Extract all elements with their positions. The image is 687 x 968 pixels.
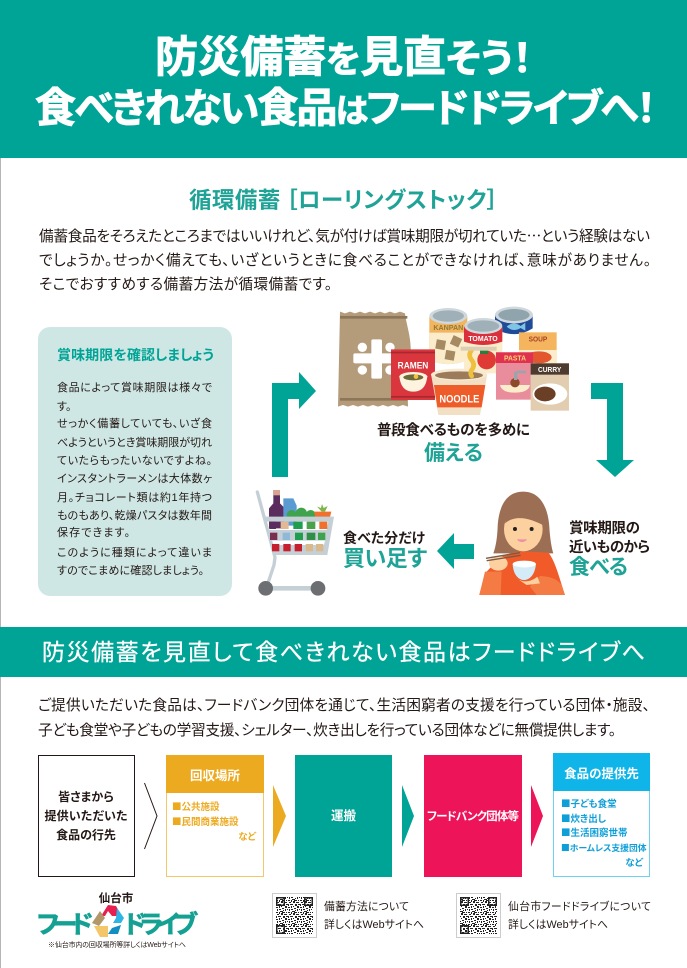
panel body text: 月。チョコレート類は約1年持つ bbox=[57, 490, 212, 504]
kanpan can bbox=[429, 308, 467, 364]
intro paragraph: 備蓄食品をそろえたところまではいいけれど、気が付けば賞味期限が切れていた…という経験はない bbox=[39, 225, 650, 246]
panel body text: せっかく備蓄していても、いざ食 bbox=[57, 416, 212, 430]
pasta box bbox=[496, 352, 533, 400]
arrow: left bbox=[437, 533, 474, 569]
illustration: shopping cart bbox=[257, 490, 334, 596]
flow box: recipients: ■子ども食堂 bbox=[561, 796, 617, 810]
arrow: up and right bbox=[272, 372, 316, 477]
arrow: outline chevron bbox=[144, 783, 157, 849]
panel body text: ていたらもったいないですよね。 bbox=[57, 454, 212, 467]
soup box bbox=[519, 332, 557, 367]
description paragraph bbox=[38, 697, 650, 739]
arrow: orange bbox=[273, 785, 286, 847]
intro paragraph bbox=[39, 225, 651, 293]
caption: prepare bbox=[377, 421, 530, 465]
section banner bbox=[0, 627, 687, 677]
description paragraph: 子ども食堂や子どもの学習支援、シェルター、炊き出しを行っている団体などに無償提供します。 bbox=[38, 722, 616, 739]
caption: restock: 買い足す bbox=[343, 546, 427, 571]
QR caption: stock method: 備蓄方法について bbox=[324, 899, 409, 913]
flow box: transport: 運搬 bbox=[331, 808, 356, 823]
QR code: food drive bbox=[456, 894, 500, 938]
intro paragraph: でしょうか。せっかく備えても、いざというときに食べることができなければ、意味がありません。 bbox=[39, 251, 651, 269]
caption: restock bbox=[343, 530, 427, 571]
illustration: person eating bbox=[479, 492, 565, 595]
flow box: recipients bbox=[553, 753, 650, 876]
flow box: recipients: ■ホームレス支援団体 bbox=[561, 841, 647, 854]
caption: eat: 賞味期限の bbox=[569, 520, 640, 537]
panel heading: 賞味期限を確認しましょう bbox=[57, 347, 214, 363]
flow box: collection points: ■公共施設 bbox=[172, 799, 220, 813]
kanpan can: KANPAN bbox=[433, 323, 464, 332]
panel body text: 保存できます。 bbox=[57, 525, 130, 539]
flow box: recipients: など bbox=[625, 855, 644, 869]
logo: Sendai food drive: フード bbox=[37, 911, 93, 939]
flow box: recipients: 食品の提供先 bbox=[564, 766, 639, 781]
description paragraph: ご提供いただいた食品は、フードバンク団体を通じて、生活困窮者の支援を行っている団体・施設、 bbox=[38, 697, 650, 714]
arrow: teal bbox=[402, 785, 414, 847]
title line 2: 食べきれない食品はフードドライブへ！ bbox=[35, 74, 656, 134]
illustration: stocked food bbox=[338, 307, 569, 415]
fish can bbox=[495, 307, 533, 334]
panel body text: すのでこまめに確認しましょう。 bbox=[57, 564, 204, 577]
panel body text: す。 bbox=[57, 400, 71, 413]
QR caption: stock method bbox=[324, 899, 424, 931]
flow box: donated food bbox=[38, 756, 134, 876]
flow box: collection points: 回収場所 bbox=[190, 768, 240, 783]
caption: eat bbox=[569, 520, 650, 579]
flow box: collection points bbox=[166, 755, 264, 876]
QR caption: stock method: 詳しくはWebサイトへ bbox=[324, 917, 424, 931]
curry pouch bbox=[531, 363, 569, 411]
logo: Sendai food drive: 仙台市 bbox=[99, 891, 134, 905]
flow box: food bank groups bbox=[424, 755, 522, 877]
flow box: food bank groups: フードバンク団体等 bbox=[427, 809, 520, 823]
caption: prepare: 普段食べるものを多めに bbox=[377, 421, 530, 439]
flow box: recipients: ■炊き出し bbox=[561, 811, 606, 825]
flow box: donated food: 食品の行先 bbox=[56, 827, 116, 842]
logo: Sendai food drive bbox=[37, 891, 198, 949]
logo: Sendai food drive: ドライブ bbox=[124, 910, 198, 939]
noodle cup bbox=[431, 347, 497, 415]
QR caption: food drive: 仙台市フードドライブについて bbox=[508, 899, 651, 913]
caption: eat: 近いものから bbox=[569, 539, 650, 556]
panel body text: ものもあり、乾燥パスタは数年間 bbox=[57, 508, 212, 522]
flow box: donated food: 提供いただいた bbox=[44, 808, 128, 823]
curry pouch: CURRY bbox=[538, 365, 561, 374]
pasta box: PASTA bbox=[504, 354, 527, 363]
panel body text: べようというとき賞味期限が切れ bbox=[57, 435, 212, 449]
icon: recycling triangle bbox=[92, 905, 124, 937]
arrow: pink bbox=[531, 785, 543, 847]
flow box: collection points: ■民間商業施設 bbox=[172, 814, 239, 828]
section heading: rolling stock: 循環備蓄 ［ローリングストック］ bbox=[189, 183, 498, 215]
caption: prepare: 備える bbox=[424, 442, 483, 465]
panel: check expiry dates bbox=[38, 327, 232, 596]
intro paragraph: そこでおすすめする備蓄方法が循環備蓄です。 bbox=[39, 276, 332, 293]
header banner bbox=[0, 0, 687, 158]
section banner: 防災備蓄を見直して食べきれない食品はフードドライブへ bbox=[42, 639, 645, 665]
panel body text: インスタントラーメンは大体数ヶ bbox=[57, 471, 212, 485]
flow box: donated food: 皆さまから bbox=[58, 789, 114, 804]
QR caption: food drive bbox=[508, 899, 651, 931]
title line 1: 防災備蓄を見直そう！ bbox=[155, 23, 532, 85]
arrow: down bbox=[591, 383, 634, 477]
flow box: collection points: など bbox=[238, 829, 257, 843]
QR caption: food drive: 詳しくはWebサイトへ bbox=[508, 917, 608, 931]
tomato can bbox=[464, 318, 502, 373]
flow box: recipients: ■生活困窮世帯 bbox=[561, 825, 628, 839]
panel body text bbox=[57, 380, 212, 577]
ramen packet: RAMEN bbox=[398, 361, 428, 371]
tomato can: TOMATO bbox=[468, 334, 498, 343]
caption: restock: 食べた分だけ bbox=[343, 530, 425, 546]
ramen packet bbox=[391, 349, 435, 400]
panel body text: このように種類によって違いま bbox=[57, 545, 212, 559]
flow box: transport bbox=[295, 755, 392, 877]
QR code: stock method bbox=[272, 894, 316, 938]
panel body text: 食品によって賞味期限は様々で bbox=[57, 380, 212, 394]
noodle cup: NOODLE bbox=[439, 394, 479, 406]
logo: Sendai food drive: ※仙台市内の回収場所等詳しくはWebサイトへ bbox=[48, 940, 186, 949]
caption: eat: 食べる bbox=[569, 556, 628, 579]
soup box: SOUP bbox=[529, 334, 547, 343]
